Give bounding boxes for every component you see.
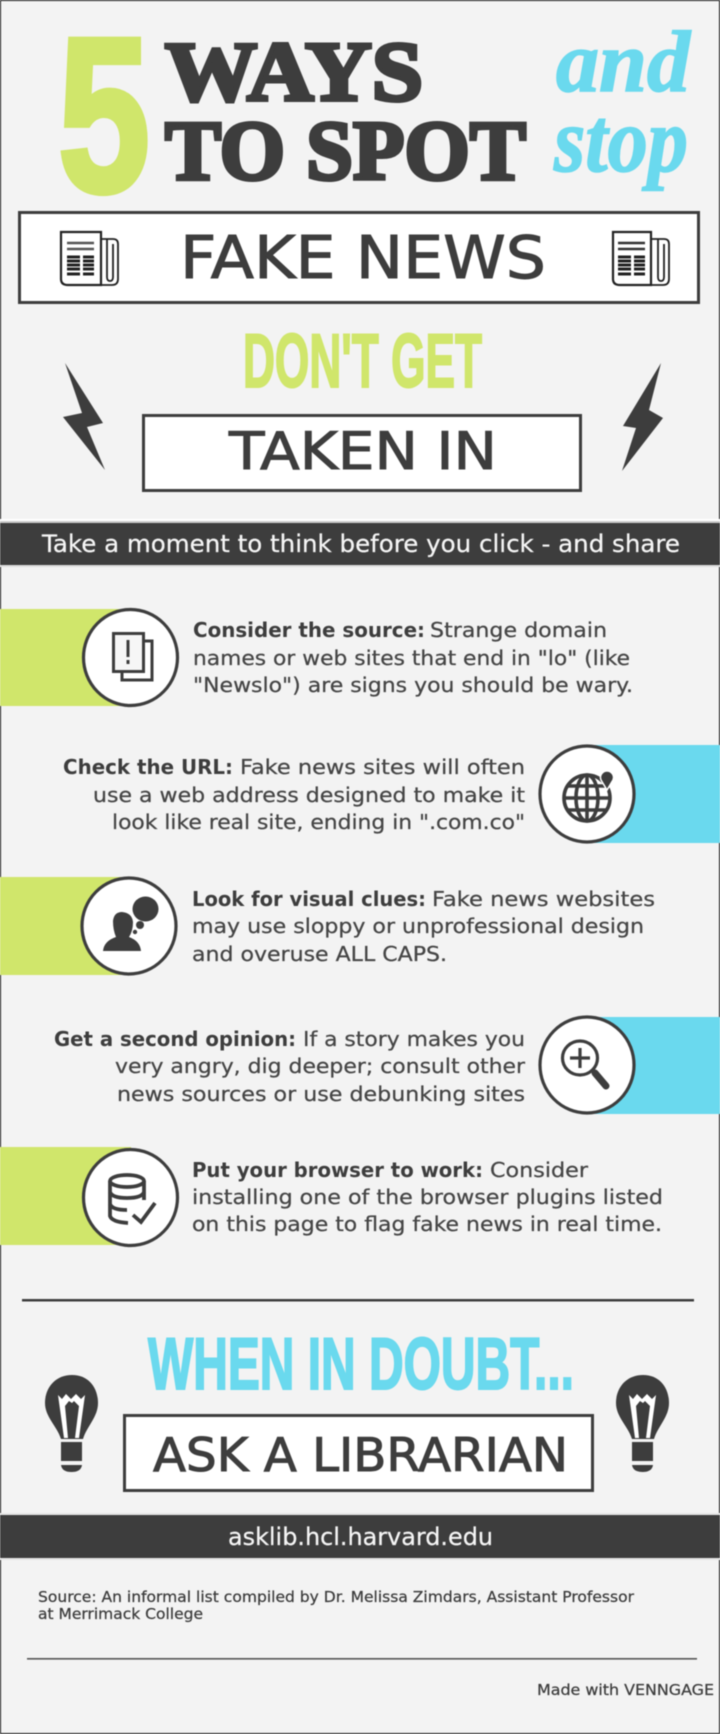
panel: tip 5 browser (0, 1147, 663, 1246)
text: check the url: Check the URL: (63, 755, 233, 779)
icon: magnifier (562, 1041, 606, 1086)
title: and stop script: and (556, 13, 691, 110)
panel: dark url band: asklib.hcl.harvard.edu (228, 1523, 493, 1551)
panel: tip 2 check the url (63, 745, 720, 843)
text: consider the source: Consider the source: (193, 618, 425, 642)
icon: light bulb left (45, 1375, 98, 1472)
panel: dark subtitle band (0, 519, 720, 567)
text: source note: Source: An informal list compiled by Dr. Melissa Zimdars, Assistant Professor (38, 1588, 635, 1606)
panel: tip 4 second opinion (54, 1017, 720, 1114)
title: and stop script: stop (553, 89, 688, 191)
text: visual clues: Look for visual clues: (192, 887, 426, 911)
icon: newspaper left (61, 232, 118, 285)
panel: taken in box (144, 416, 580, 490)
text: browser: installing one of the browser plugins listed (192, 1185, 663, 1209)
text: visual clues: may use sloppy or unprofessional design (192, 914, 644, 938)
panel: dark url band (0, 1513, 720, 1560)
panel: fake news banner (20, 212, 698, 302)
panel: dark subtitle band: Take a moment to think before you click - and share (41, 530, 680, 558)
text: second opinion: Get a second opinion: (54, 1027, 296, 1051)
title: 5 ways to spot: WAYS (165, 25, 423, 119)
title: and stop script (553, 13, 691, 191)
text: second opinion: news sources or use debunking sites (117, 1082, 525, 1106)
text: consider the source (193, 618, 633, 697)
text: browser: Put your browser to work: (192, 1158, 483, 1182)
title: 5 ways to spot (58, 0, 526, 238)
icon: person thinking (103, 896, 158, 951)
text: second opinion (54, 1027, 526, 1106)
panel: ask a librarian box (124, 1416, 592, 1490)
text: check the url (63, 755, 525, 834)
text: check the url: Fake news sites will often (240, 755, 525, 779)
text: browser: Consider (490, 1158, 589, 1182)
text: consider the source: Strange domain (430, 618, 607, 642)
text: check the url: use a web address designed to make it (93, 783, 525, 807)
text: consider the source: names or web sites that end in "lo" (like (193, 646, 630, 670)
icon: globe with pin (564, 771, 613, 821)
text: made with venngage: Made with VENNGAGE (537, 1681, 714, 1699)
text: browser (192, 1158, 663, 1236)
text: visual clues: Fake news websites (432, 887, 655, 911)
text: second opinion: If a story makes you (303, 1027, 525, 1051)
text: visual clues: and overuse ALL CAPS. (192, 942, 447, 966)
icon: database with check (110, 1175, 155, 1223)
text: source note (38, 1588, 635, 1623)
panel: taken in box: TAKEN IN (228, 422, 497, 482)
heading: don't get: DON'T GET (243, 319, 482, 404)
text: source note: at Merrimack College (38, 1605, 203, 1623)
icon: newspaper right (613, 232, 669, 285)
text: consider the source: "Newslo") are signs you should be wary. (193, 673, 633, 697)
text: browser: on this page to flag fake news in real time. (192, 1212, 662, 1236)
icon: light bulb right (616, 1375, 669, 1472)
text: visual clues (192, 887, 655, 966)
heading: fake news: FAKE NEWS (180, 223, 546, 292)
panel: tip 1 consider the source (0, 609, 633, 706)
icon: alert documents (114, 634, 152, 680)
panel: ask a librarian box: ASK A LIBRARIAN (153, 1428, 568, 1482)
panel: tip 3 visual clues (0, 877, 655, 975)
icon: lightning left (63, 363, 105, 470)
title: 5 ways to spot: TO SPOT (165, 104, 526, 198)
text: second opinion: very angry, dig deeper; consult other (115, 1054, 526, 1078)
icon: lightning right (622, 363, 663, 471)
text: check the url: look like real site, ending in ".com.co" (112, 810, 525, 834)
